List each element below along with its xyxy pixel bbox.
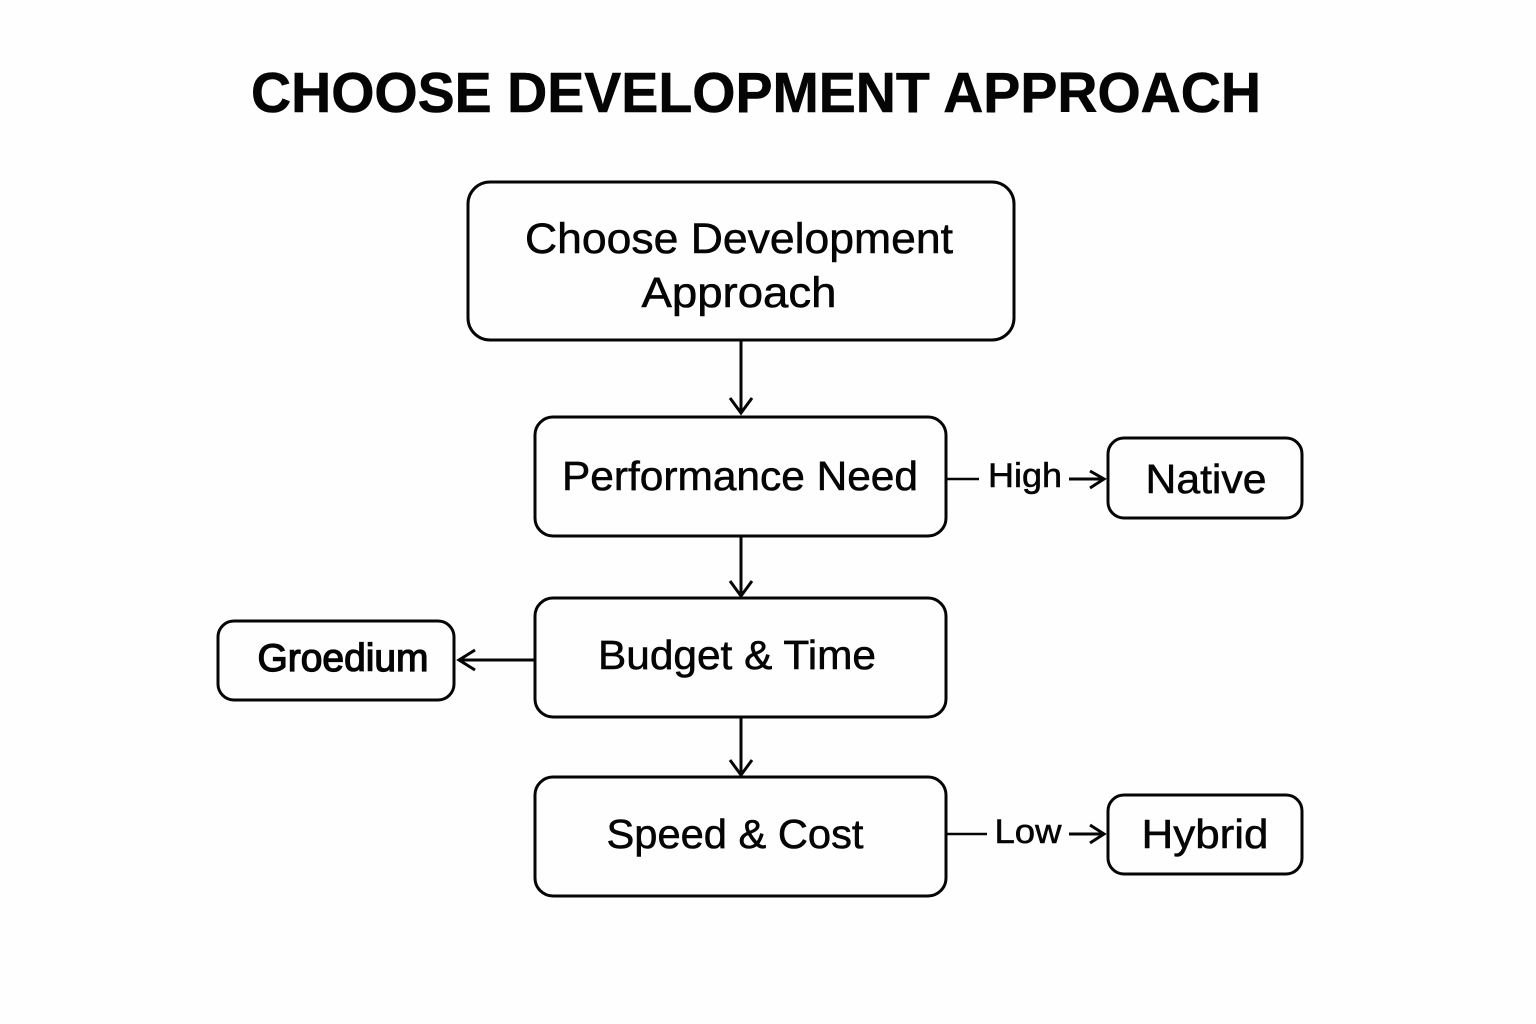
box: choose development approach bbox=[468, 182, 1014, 340]
arrow: low to hybrid bbox=[946, 813, 1104, 851]
box: choose development approach: Choose Development bbox=[525, 215, 953, 263]
box: hybrid: Hybrid bbox=[1142, 811, 1268, 857]
box: left option bbox=[218, 621, 454, 700]
box: choose development approach: Approach bbox=[642, 269, 836, 317]
arrow: top box to performance need bbox=[730, 340, 752, 413]
box: hybrid bbox=[1108, 795, 1302, 874]
box: native: Native bbox=[1146, 456, 1266, 502]
box: performance need bbox=[535, 417, 946, 536]
arrow: performance need to budget bbox=[730, 536, 752, 596]
box: left option: Groedium bbox=[258, 637, 428, 680]
arrow: budget to speed bbox=[730, 717, 752, 775]
box: performance need: Performance Need bbox=[562, 453, 918, 499]
box: budget and time: Budget & Time bbox=[598, 632, 876, 678]
arrow: low to hybrid: Low bbox=[994, 813, 1062, 851]
arrow: high to native bbox=[946, 457, 1104, 495]
arrow: high to native: High bbox=[988, 457, 1062, 495]
box: native bbox=[1108, 438, 1302, 518]
arrow: budget to left option bbox=[459, 650, 535, 670]
title: CHOOSE DEVELOPMENT APPROACH bbox=[251, 61, 1261, 124]
box: speed and cost bbox=[535, 777, 946, 896]
box: speed and cost: Speed & Cost bbox=[606, 811, 864, 857]
box: budget and time bbox=[535, 598, 946, 717]
